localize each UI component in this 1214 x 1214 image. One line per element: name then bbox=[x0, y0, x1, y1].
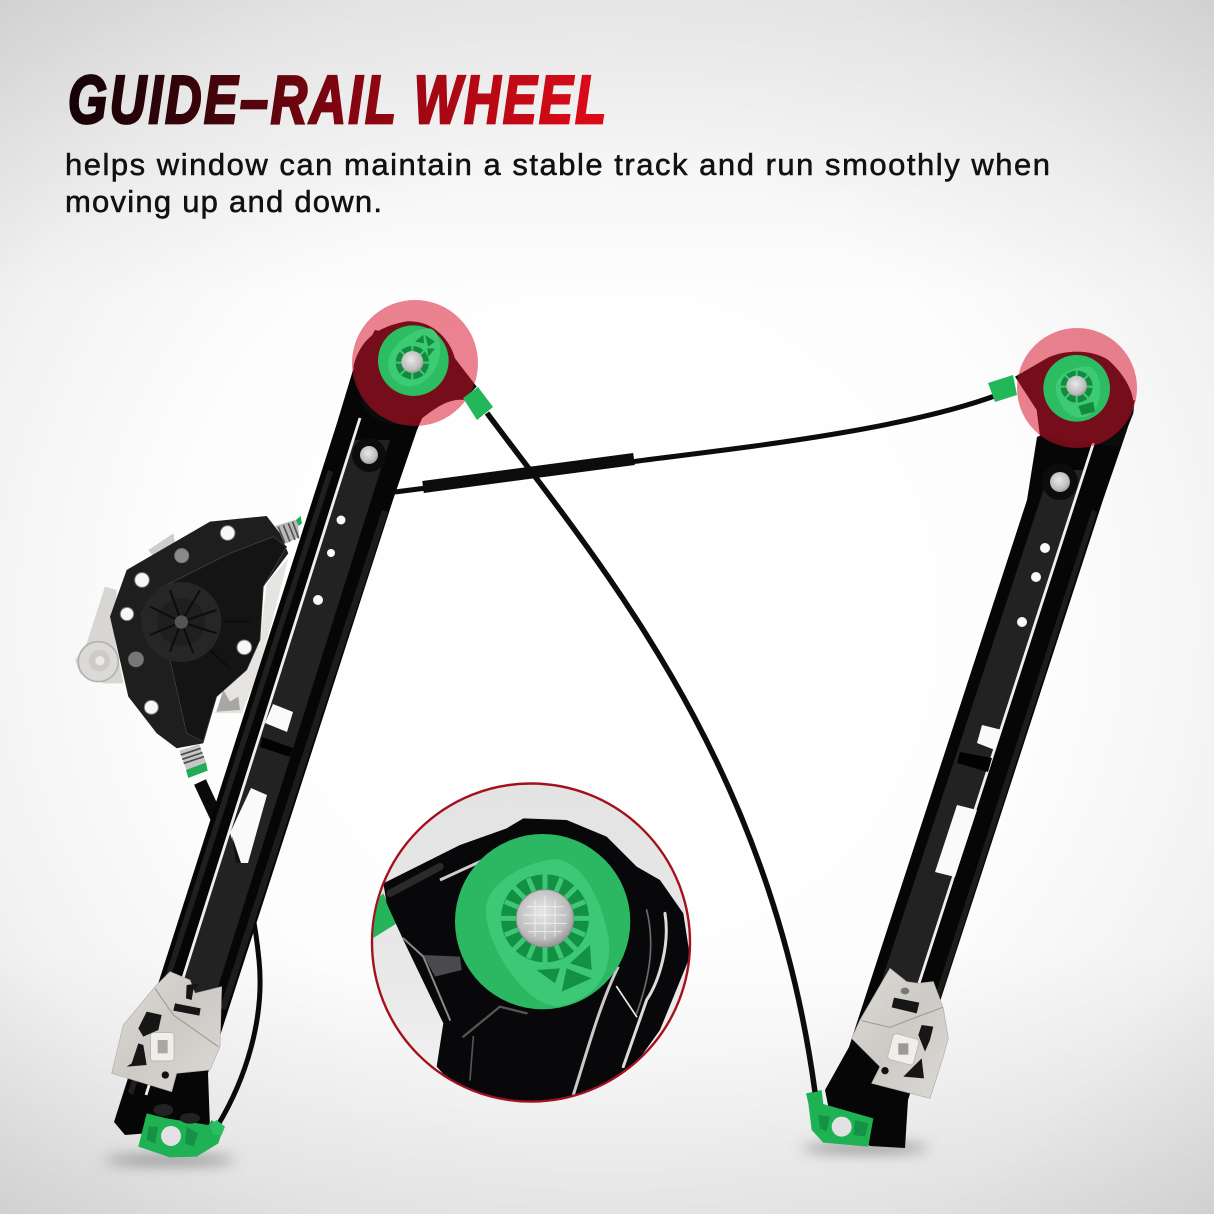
description text bbox=[65, 147, 1050, 219]
green wheel bbox=[455, 834, 630, 1009]
rail highlight line bbox=[908, 398, 1108, 1030]
rail side strips bbox=[128, 470, 333, 1095]
silver bracket and roller bbox=[75, 533, 288, 713]
recess below window bbox=[260, 737, 293, 757]
rail holes bbox=[935, 543, 1050, 877]
green end cap bbox=[806, 1090, 873, 1147]
left pulley head bbox=[353, 321, 477, 425]
steel cable bbox=[440, 859, 485, 880]
black rail head bbox=[383, 818, 690, 1107]
title: GUIDE–RAIL WHEEL bbox=[68, 62, 606, 138]
recess below window bbox=[957, 752, 992, 772]
right pulley head bbox=[1015, 352, 1134, 447]
highlight circle: right pulley bbox=[1017, 328, 1137, 448]
rail mounting bolt bbox=[352, 438, 386, 472]
highlight circle: left pulley bbox=[352, 300, 478, 426]
green cable stub bbox=[373, 893, 396, 938]
horizontal cable with sleeve bbox=[395, 394, 1000, 492]
rail mounting bolt bbox=[1042, 464, 1078, 500]
rail centre panel bbox=[872, 470, 1085, 1010]
upper spring bbox=[275, 516, 302, 543]
rail centre panel bbox=[176, 440, 390, 1000]
motor housing bbox=[110, 516, 288, 748]
long cable to bottom right bbox=[487, 413, 815, 1092]
green end cap bbox=[138, 1113, 225, 1157]
description text: moving up and down. bbox=[65, 184, 382, 219]
inset magnified wheel bbox=[367, 784, 690, 1107]
lower left cable bbox=[200, 782, 260, 1125]
right rail bottom bracket bbox=[806, 968, 948, 1147]
metal hub bbox=[516, 890, 574, 947]
left rail bottom bracket bbox=[112, 972, 225, 1157]
rail holes bbox=[230, 516, 346, 863]
green cable collars bbox=[463, 375, 1017, 420]
lower spring with green collar bbox=[179, 744, 208, 778]
description text: helps window can maintain a stable track and run smoothly when bbox=[65, 147, 1050, 182]
ground shadows bbox=[104, 1144, 929, 1164]
rail highlight line bbox=[146, 418, 360, 1095]
right guide rail bbox=[825, 398, 1135, 1148]
rail side strips bbox=[920, 510, 1097, 1045]
right pulley wheel bbox=[1043, 355, 1110, 422]
window motor gearbox bbox=[75, 516, 302, 778]
left pulley wheel bbox=[378, 325, 449, 396]
housing holes bbox=[120, 526, 252, 714]
left guide rail bbox=[114, 330, 430, 1135]
gloss highlights bbox=[390, 867, 666, 1080]
